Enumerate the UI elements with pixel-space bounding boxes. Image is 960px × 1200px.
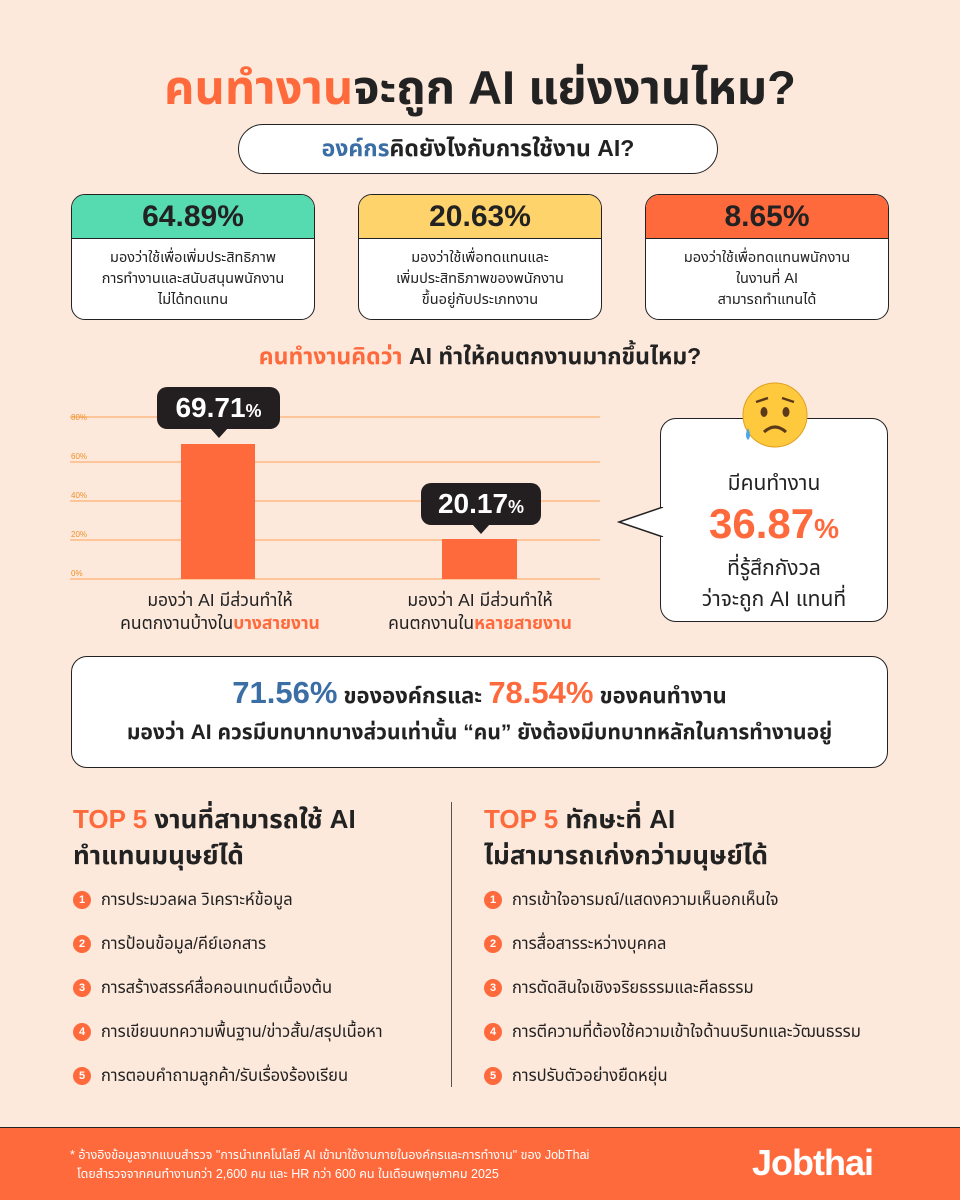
heading: top5 jobs xyxy=(73,801,356,870)
list: jobs: 3 xyxy=(79,982,85,994)
card: 20.63: มองว่าใช้เพื่อทดแทนและ xyxy=(411,250,549,266)
banner: 71.56 / 78.54 xyxy=(71,656,888,768)
card: 8.65: 8.65% xyxy=(724,200,810,233)
bar chart: 20% xyxy=(71,530,87,539)
list: jobs: 4 xyxy=(79,1026,85,1038)
card: 8.65: ในงานที่ AI xyxy=(736,271,798,287)
callout: 36.87: ว่าจะถูก AI แทนที่ xyxy=(702,588,846,611)
footnote: โดยสำรวจจากคนทำงานกว่า 2,600 คน และ HR กว่า 600 คน ในเดือนพฤษภาคม 2025 xyxy=(77,1167,499,1181)
axis label 1 xyxy=(120,590,320,633)
list: skills: 3 xyxy=(490,982,496,994)
label 69.71: 69.71% xyxy=(175,392,262,423)
list: jobs: การสร้างสรรค์สื่อคอนเทนต์เบื้องต้น xyxy=(101,978,332,996)
label 20.17 xyxy=(421,483,541,525)
label 20.17: 20.17% xyxy=(438,488,524,519)
list: skills: 1 xyxy=(490,894,496,906)
list: skills: การปรับตัวอย่างยืดหยุ่น xyxy=(512,1066,668,1084)
card: 64.89: ไม่ได้ทดแทน xyxy=(158,292,228,308)
card: 20.63 xyxy=(358,194,602,320)
footer xyxy=(0,1127,960,1200)
list: skills: การสื่อสารระหว่างบุคคล xyxy=(512,934,666,952)
list: skills: การตัดสินใจเชิงจริยธรรมและศีลธรรม xyxy=(512,978,754,996)
bar chart: 40% xyxy=(71,491,87,500)
list: jobs: การป้อนข้อมูล/คีย์เอกสาร xyxy=(101,934,266,952)
card: 20.63: 20.63% xyxy=(429,200,531,233)
footnote: * อ้างอิงข้อมูลจากแบบสำรวจ "การนำเทคโนโลยี AI เข้ามาใช้งานภายในองค์กรและการทำงาน" ของ JobThai xyxy=(70,1148,589,1162)
section heading: คนทำงานคิดว่า AI ทำให้คนตกงานมากขึ้นไหม? xyxy=(259,343,701,369)
heading: top5 skills: ไม่สามารถเก่งกว่ามนุษย์ได้ xyxy=(484,840,768,870)
list: skills: การเข้าใจอารมณ์/แสดงความเห็นอกเห็นใจ xyxy=(512,890,779,908)
list: skills: 5 xyxy=(490,1070,496,1082)
card: 20.63: เพิ่มประสิทธิภาพของพนักงาน xyxy=(396,271,564,287)
card: 64.89: 64.89% xyxy=(142,200,244,233)
banner: 71.56 / 78.54: 71.56% ขององค์กรและ 78.54% ของคนทำงาน xyxy=(232,675,727,710)
card: 20.63: ขึ้นอยู่กับประเภทงาน xyxy=(422,292,538,308)
bar chart: 0% xyxy=(71,569,83,578)
footnote xyxy=(70,1148,589,1181)
list: jobs: 1 xyxy=(79,894,85,906)
axis label 2 xyxy=(388,590,572,633)
list: skills: 4 xyxy=(490,1026,496,1038)
icon: sad face xyxy=(742,382,808,448)
callout: 36.87: 36.87% xyxy=(709,500,839,547)
list: skills xyxy=(484,890,861,1086)
card: 64.89 xyxy=(71,194,315,320)
list: jobs xyxy=(73,890,383,1086)
bar chart: 60% xyxy=(71,452,87,461)
card: 8.65: สามารถทำแทนได้ xyxy=(718,292,816,308)
card: 64.89: การทำงานและสนับสนุนพนักงาน xyxy=(102,271,284,287)
card: 8.65: มองว่าใช้เพื่อทดแทนพนักงาน xyxy=(684,250,850,266)
callout: 36.87 xyxy=(660,418,888,622)
banner: 71.56 / 78.54: มองว่า AI ควรมีบทบาทบางส่วนเท่านั้น “คน” ยังต้องมีบทบาทหลักในการทำงานอยู่ xyxy=(127,721,832,744)
axis label 2: คนตกงานในหลายสายงาน xyxy=(388,613,572,633)
heading: top5 jobs: ทำแทนมนุษย์ได้ xyxy=(73,840,244,870)
axis label 1: มองว่า AI มีส่วนทำให้ xyxy=(147,590,293,610)
logo: Jobthai xyxy=(752,1142,873,1183)
list: jobs: การประมวลผล วิเคราะห์ข้อมูล xyxy=(101,890,293,908)
list: jobs: การเขียนบทความพื้นฐาน/ข่าวสั้น/สรุปเนื้อหา xyxy=(101,1022,383,1040)
list: jobs: การตอบคำถามลูกค้า/รับเรื่องร้องเรียน xyxy=(101,1066,348,1084)
card: 8.65 xyxy=(645,194,889,320)
card: 64.89: มองว่าใช้เพื่อเพิ่มประสิทธิภาพ xyxy=(110,250,276,266)
axis label 2: มองว่า AI มีส่วนทำให้ xyxy=(407,590,553,610)
callout: 36.87: ที่รู้สึกกังวล xyxy=(727,557,821,580)
title: คนทำงานจะถูก AI แย่งงานไหม? xyxy=(164,61,796,114)
list: skills: 2 xyxy=(490,938,496,950)
list: jobs: 5 xyxy=(79,1070,85,1082)
subtitle pill xyxy=(238,124,718,174)
heading: top5 skills: TOP 5 ทักษะที่ AI xyxy=(484,804,675,834)
heading: top5 skills xyxy=(484,801,768,870)
heading: top5 jobs: TOP 5 งานที่สามารถใช้ AI xyxy=(73,804,356,834)
axis label 1: คนตกงานบ้างในบางสายงาน xyxy=(120,613,320,633)
divider xyxy=(451,802,452,1087)
label 69.71 xyxy=(157,387,280,429)
list: jobs: 2 xyxy=(79,938,85,950)
bar chart: 80% xyxy=(71,413,87,422)
bar chart xyxy=(70,387,600,633)
subtitle pill: องค์กรคิดยังไงกับการใช้งาน AI? xyxy=(322,135,634,161)
list: skills: การตีความที่ต้องใช้ความเข้าใจด้านบริบทและวัฒนธรรม xyxy=(512,1022,861,1040)
callout: 36.87: มีคนทำงาน xyxy=(728,472,820,495)
